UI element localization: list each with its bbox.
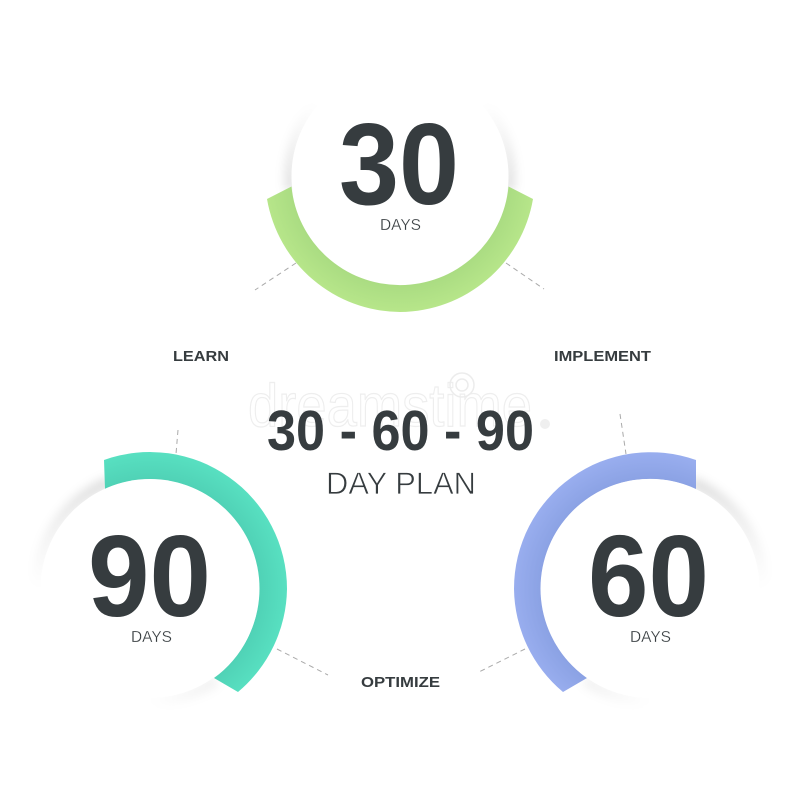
ring: green arc — [267, 186, 533, 312]
panel: 30 days — [267, 68, 533, 312]
circle: 30 — [292, 68, 508, 284]
label: days: DAYS — [380, 217, 421, 234]
panel: 90 days — [38, 452, 287, 700]
circle: 60 — [540, 479, 760, 698]
shadow: 90 circle — [38, 482, 216, 700]
ring: blue arc — [514, 452, 696, 692]
label: optimize: OPTIMIZE — [361, 674, 440, 691]
shadow: 60 circle — [585, 482, 762, 700]
dashed connector: 60 to implement — [620, 414, 626, 454]
label: days: DAYS — [131, 629, 172, 646]
dashed connector: 30 to learn — [255, 263, 296, 290]
subtitle: day plan: DAY PLAN — [326, 465, 476, 501]
label: implement: IMPLEMENT — [554, 348, 651, 365]
watermark: dreamstime — [248, 372, 532, 439]
title: 30 - 60 - 90: 30 - 60 - 90 — [267, 399, 534, 463]
label: days: DAYS — [630, 629, 671, 646]
circle: 90 — [40, 479, 260, 698]
number: 30: 30 — [339, 99, 459, 229]
dashed connector: 90 to optimize — [277, 649, 328, 675]
number: 60: 60 — [588, 511, 709, 641]
panel: 60 days — [514, 452, 762, 700]
shadow: 30 circle — [290, 100, 510, 190]
label: learn: LEARN — [173, 348, 229, 365]
dashed connector: 90 to learn — [176, 430, 178, 454]
ring: teal arc — [104, 452, 287, 692]
dashed connector: 60 to optimize — [479, 649, 525, 672]
number: 90: 90 — [88, 511, 211, 641]
dashed connector: 30 to implement — [506, 263, 544, 289]
